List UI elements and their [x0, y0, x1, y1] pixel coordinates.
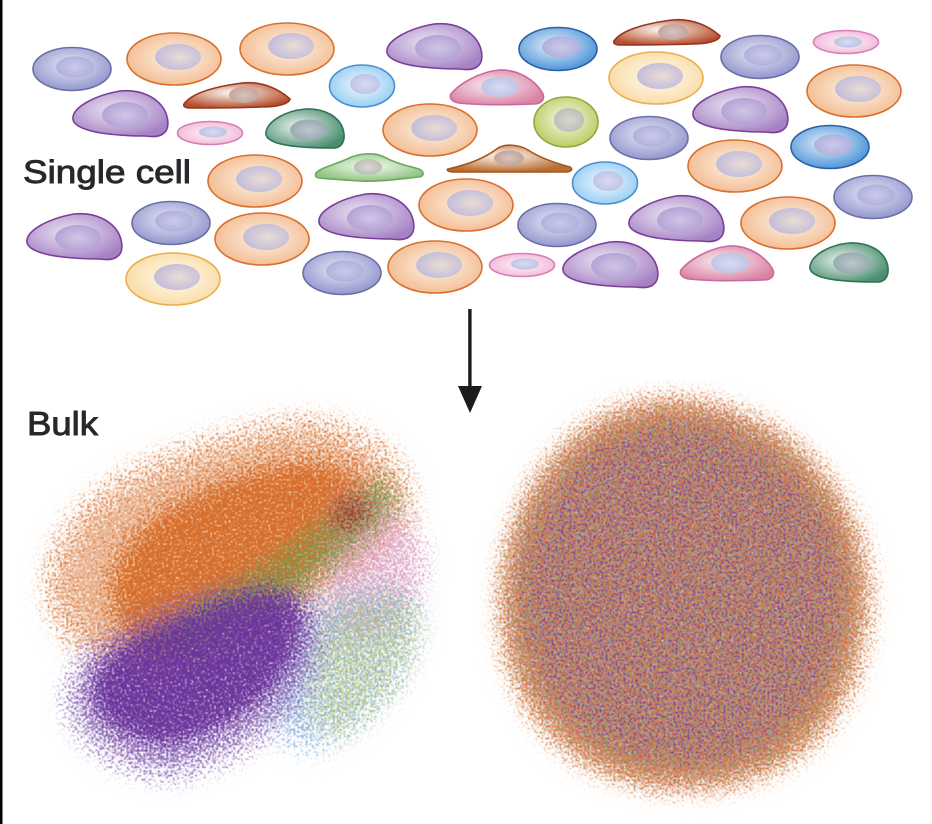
layer: green boundary band	[140, 470, 400, 665]
cell: orange	[208, 155, 302, 207]
layer: purple	[520, 424, 845, 765]
layer: yellow green group	[310, 598, 420, 738]
cell: periwinkle	[610, 116, 688, 160]
layer: orange top	[508, 408, 860, 782]
cell: orange	[419, 179, 513, 231]
left edge bar	[0, 0, 2, 824]
cell: purple	[319, 194, 414, 240]
layer: green	[508, 408, 860, 782]
layer: dense purple	[92, 590, 302, 745]
cell: brown flat	[614, 20, 720, 45]
cell: periwinkle	[721, 36, 799, 78]
layer: orange	[500, 398, 870, 790]
layer: pale orange	[62, 435, 392, 665]
chart: right scatter cloud, cell types mixed	[500, 398, 870, 790]
cell: purple	[27, 214, 122, 260]
cell: light blue	[572, 162, 638, 204]
cell: small pink	[490, 254, 554, 276]
heading: single cell: Single cell	[23, 154, 191, 190]
cell: periwinkle	[518, 204, 596, 246]
cell: tan flat	[447, 145, 572, 172]
layer: dark red cluster	[332, 496, 372, 530]
cell: periwinkle	[834, 176, 912, 218]
heading: bulk: Bulk	[27, 405, 99, 442]
cell: yellow	[126, 253, 220, 305]
cell: brown flat	[184, 83, 290, 108]
cell: blue	[791, 126, 869, 168]
cell: lime	[534, 97, 598, 147]
cell: light blue	[330, 65, 394, 107]
cell: orange	[127, 33, 221, 85]
cell: orange	[215, 213, 309, 265]
cell: small pink	[814, 30, 878, 54]
cell: orange	[383, 104, 477, 156]
layer: blue group	[268, 588, 418, 749]
layer: pale purple fringe	[68, 585, 322, 778]
cell: periwinkle	[303, 252, 381, 294]
cell: orange	[688, 140, 782, 192]
cell: periwinkle	[33, 48, 111, 90]
cell: pink	[450, 70, 544, 105]
layer: base pale orange	[512, 412, 855, 778]
cell: pink	[680, 246, 774, 281]
layer: pink group	[319, 488, 425, 645]
layer: sparse orange halo	[48, 420, 412, 675]
cell: purple	[387, 24, 482, 70]
arrow: single cell to bulk	[458, 309, 482, 413]
cell: green flat	[315, 154, 423, 181]
cell: blue	[519, 28, 597, 70]
cell: orange	[741, 197, 835, 249]
cell: purple	[73, 91, 168, 137]
cell: purple	[629, 196, 724, 242]
layer: light blue	[520, 424, 845, 765]
cell: yellow	[609, 52, 703, 104]
cell: orange	[807, 65, 901, 117]
layer: pink	[508, 408, 860, 782]
cell: dark green	[810, 243, 888, 282]
cell: purple	[563, 242, 658, 288]
cell: periwinkle	[132, 202, 210, 244]
layer: dense orange	[110, 461, 375, 660]
cell: orange	[388, 241, 482, 293]
cell: purple	[693, 87, 788, 133]
cell: dark green	[266, 109, 344, 148]
cell: orange	[240, 23, 334, 75]
chart: left scatter cloud, cell types separated	[48, 420, 425, 778]
panel: single cell population	[27, 20, 912, 305]
cell: small pink	[178, 122, 242, 144]
